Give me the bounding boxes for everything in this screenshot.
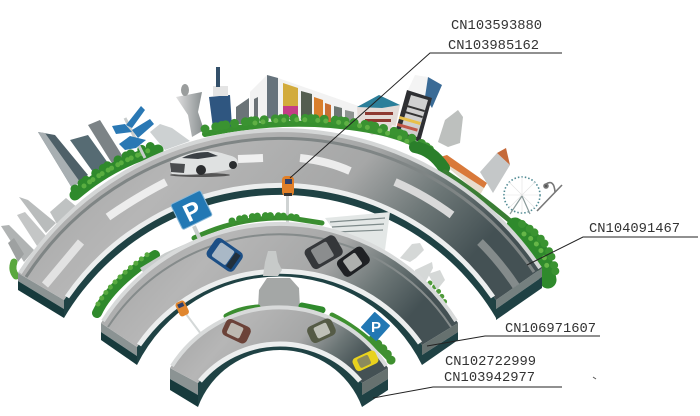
grey monuments right of the middle road bbox=[400, 243, 445, 290]
road curbs bbox=[108, 234, 451, 327]
lane markings bbox=[45, 158, 516, 286]
icon: direction signpost bbox=[112, 106, 154, 158]
callout: top patents: CN103593880 bbox=[451, 19, 542, 34]
road underside shadow bbox=[137, 272, 422, 365]
icon: white car on top road bbox=[170, 151, 238, 177]
callout: inner road patents: CN102722999 bbox=[445, 355, 536, 370]
callout: top patents: CN103985162 bbox=[448, 39, 539, 54]
greenery along the inner road bbox=[226, 306, 392, 362]
small grey buildings behind the middle road bbox=[140, 242, 190, 275]
callout: inner road patents bbox=[373, 355, 562, 398]
callout: CN106971607: CN106971607 bbox=[505, 322, 596, 337]
icon: large parking sign: P bbox=[179, 196, 206, 228]
road curbs bbox=[26, 138, 534, 277]
road front faces bbox=[101, 323, 458, 365]
road front faces bbox=[18, 268, 542, 320]
road surface bbox=[18, 129, 542, 300]
icon: parking meter on top road bbox=[282, 176, 294, 227]
icon: olive car bbox=[305, 317, 337, 345]
icon: yellow car bbox=[351, 349, 380, 372]
road underside shadow bbox=[198, 345, 362, 407]
callout: CN106971607 bbox=[427, 322, 600, 346]
icon: thinker statue on rock bbox=[258, 251, 300, 308]
greenery along the middle road bbox=[97, 216, 446, 313]
road underside shadow bbox=[64, 186, 496, 318]
road surface bbox=[101, 225, 458, 347]
icon: ferris wheel bbox=[504, 177, 540, 214]
callout: top patents bbox=[290, 19, 562, 178]
panel: inner road bbox=[170, 307, 388, 407]
greenery along the top road bbox=[13, 118, 556, 280]
icon: dark car right bbox=[335, 245, 372, 279]
callout: CN104091467 bbox=[527, 222, 698, 265]
icon: blue car bbox=[205, 236, 245, 274]
city skyline behind the top road bbox=[1, 67, 510, 262]
panel: middle road bbox=[101, 224, 458, 365]
icon: street lamp bbox=[537, 183, 562, 211]
icon: small parking meter and pole bbox=[175, 300, 201, 334]
road surface bbox=[170, 308, 388, 383]
road front faces bbox=[170, 368, 388, 407]
icon: dark car left bbox=[303, 233, 345, 271]
skewed office building behind the middle road bbox=[325, 212, 390, 250]
icon: brown car bbox=[220, 317, 252, 345]
icon: large parking sign bbox=[171, 190, 213, 249]
road curbs bbox=[172, 307, 386, 366]
callout: inner road patents: CN103942977 bbox=[444, 371, 535, 386]
icon: small parking sign: P bbox=[371, 319, 381, 336]
icon: small parking sign bbox=[361, 312, 390, 341]
panel: top road bbox=[18, 129, 542, 320]
callout: CN104091467: CN104091467 bbox=[589, 222, 680, 237]
